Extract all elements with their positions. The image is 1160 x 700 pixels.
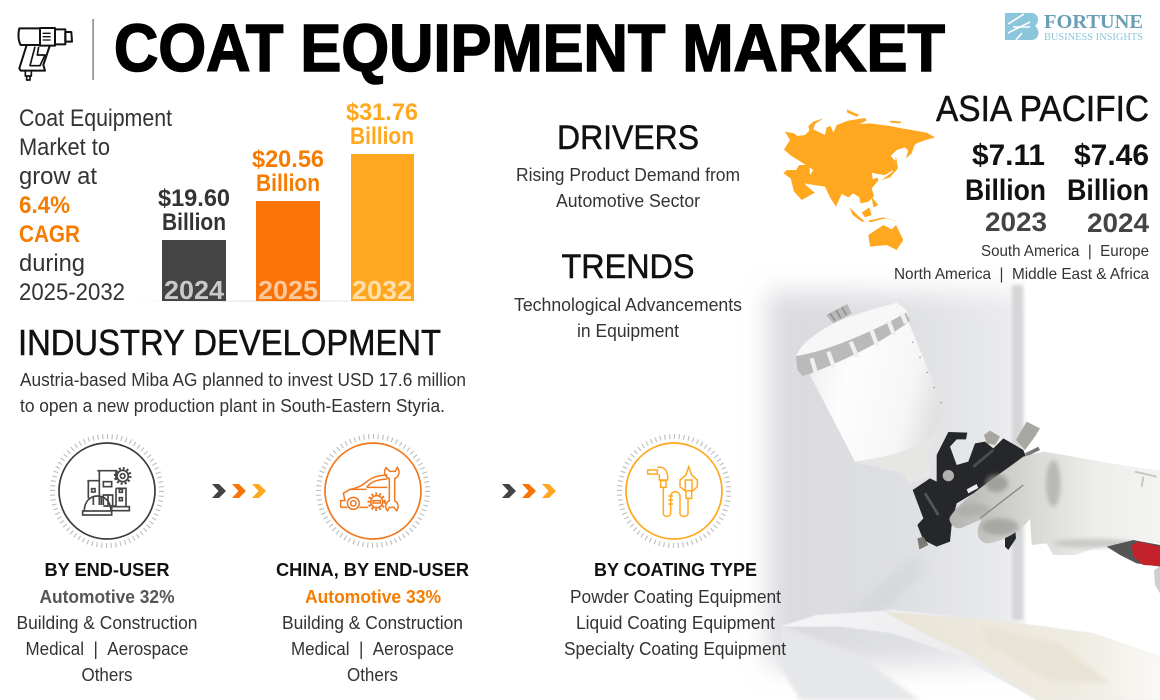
lid ridge band xyxy=(796,313,910,376)
text block: growth statement: Coat Equipment xyxy=(19,105,172,132)
text block: growth statement: 2025-2032 xyxy=(19,279,125,306)
bar 2024: $19.60 xyxy=(158,185,230,212)
text block: by end-user: Automotive 32% xyxy=(40,587,174,607)
text block: by end-user: Building & Construction xyxy=(16,613,198,633)
car body xyxy=(780,610,1160,700)
text block: China by end-user: Building & Construction xyxy=(282,613,463,633)
text block: China by end-user: CHINA, BY END-USER xyxy=(276,559,469,580)
text block: China by end-user: Medical | Aerospace xyxy=(291,639,454,659)
text block: China by end-user: Automotive 33% xyxy=(305,587,441,607)
text block: growth statement: grow at xyxy=(19,163,97,190)
text block: industry development: Austria-based Miba AG planned to invest USD 17.6 million xyxy=(20,370,466,390)
text block: by coating type: BY COATING TYPE xyxy=(594,559,757,580)
text block: Asia Pacific values: Billion xyxy=(1067,174,1149,207)
text block: drivers xyxy=(516,119,740,211)
text block: by coating type: Specialty Coating Equipment xyxy=(564,639,786,659)
text block: trends xyxy=(514,248,742,341)
text block: industry development: to open a new production plant in South-Eastern Styria. xyxy=(20,396,445,416)
glove xyxy=(949,452,1160,555)
text block: growth statement: 6.4% xyxy=(19,192,70,219)
bar 2025: $20.56 xyxy=(252,146,324,173)
photo: spray gun painting a car xyxy=(768,280,1160,700)
text block: Asia Pacific values: Billion xyxy=(965,174,1046,207)
bar 2025 xyxy=(252,146,324,305)
text block: trends: Technological Advancements xyxy=(514,295,742,315)
text block: trends: TRENDS xyxy=(562,248,694,286)
text block: by end-user: Medical | Aerospace xyxy=(26,639,188,659)
text block: growth statement xyxy=(19,105,172,306)
logo: Fortune Business Insights: BUSINESS INSIGHTS xyxy=(1044,32,1143,43)
text block: growth statement: CAGR xyxy=(19,221,80,248)
bar 2024: 2024 xyxy=(164,275,225,305)
text block: Asia Pacific values: North America | Middle East & Africa xyxy=(894,266,1149,283)
text block: by end-user: BY END-USER xyxy=(44,559,170,580)
icon: car with wrench xyxy=(318,436,428,546)
text block: Asia Pacific values xyxy=(894,88,1149,283)
text block: drivers: Automotive Sector xyxy=(556,191,700,211)
text block: Asia Pacific values: $7.46 xyxy=(1074,139,1149,172)
text block: Asia Pacific values: ASIA PACIFIC xyxy=(936,88,1149,129)
bar 2032: $31.76 xyxy=(346,99,418,126)
scale marks xyxy=(913,342,944,408)
text block: Asia Pacific values: South America | Europe xyxy=(981,243,1149,260)
text block: Asia Pacific values: $7.11 xyxy=(972,139,1045,172)
text block: growth statement: Market to xyxy=(19,134,110,161)
arrows: first chevrons xyxy=(212,484,266,498)
cup xyxy=(810,322,945,484)
text block: by end-user: Others xyxy=(82,665,132,685)
icon: paint gun outline xyxy=(18,28,72,80)
bar 2025: Billion xyxy=(256,170,320,197)
bar chart: market size xyxy=(130,99,430,305)
bar 2025: 2025 xyxy=(258,275,318,305)
text block: by coating type: Powder Coating Equipment xyxy=(570,587,781,607)
text block: by end-user xyxy=(16,559,198,685)
text block: industry development: INDUSTRY DEVELOPMENT xyxy=(18,322,441,363)
text block: by coating type xyxy=(564,559,786,659)
text block: growth statement: during xyxy=(19,250,85,277)
logo: Fortune Business Insights: FORTUNE xyxy=(1044,11,1143,33)
map: Asia Pacific xyxy=(783,109,935,250)
red regulator xyxy=(1107,540,1160,567)
icon: end-user factory xyxy=(52,436,162,546)
text block: Asia Pacific values: 2023 xyxy=(985,207,1047,237)
header divider xyxy=(92,19,94,80)
title: COAT EQUIPMENT MARKET xyxy=(114,11,945,86)
text block: trends: in Equipment xyxy=(577,321,679,341)
bar 2024: Billion xyxy=(162,209,226,236)
text block: drivers: Rising Product Demand from xyxy=(516,165,740,185)
icon: coating cable connectors xyxy=(620,436,728,546)
cup lid dome xyxy=(796,303,908,360)
bar 2024 xyxy=(158,185,230,305)
gun body xyxy=(913,432,1027,547)
arrows: second chevrons xyxy=(502,484,556,498)
text block: by coating type: Liquid Coating Equipment xyxy=(576,613,775,633)
text block: drivers: DRIVERS xyxy=(557,119,699,157)
text block: industry development xyxy=(18,322,466,416)
logo: Fortune Business Insights xyxy=(1005,11,1143,43)
text block: Asia Pacific values: 2024 xyxy=(1087,208,1149,238)
bar 2032: Billion xyxy=(350,123,414,150)
bar 2032: 2032 xyxy=(352,275,412,305)
text block: China by end-user: Others xyxy=(347,665,398,685)
bar 2032 xyxy=(346,99,418,305)
text block: China by end-user xyxy=(276,559,469,685)
